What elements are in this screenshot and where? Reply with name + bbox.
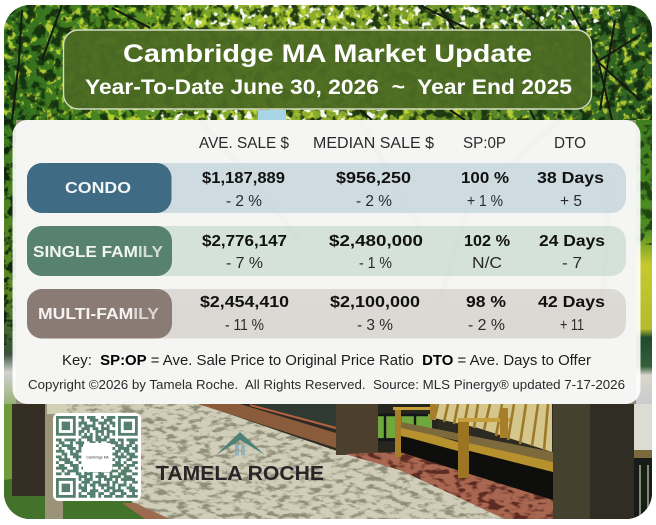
single family values: 24 Days (539, 233, 605, 250)
single family changes: - 7 % (226, 255, 263, 272)
right background (634, 404, 652, 519)
foliage canopy (4, 5, 652, 125)
left foliage strip (4, 120, 16, 420)
logo wordmark: TAMELA ROCHE (156, 463, 324, 485)
single family label (27, 226, 172, 276)
logo: Tamela Roche (156, 432, 324, 485)
icon: house roof (216, 432, 265, 456)
column headers: AVE. SALE $ (199, 135, 289, 152)
multi-family values: $2,454,410 (200, 294, 289, 311)
multi-family values: $2,100,000 (330, 294, 420, 311)
multi-family changes: - 3 % (357, 317, 393, 334)
column headers: MEDIAN SALE $ (313, 135, 434, 152)
QR code (53, 413, 141, 501)
bench shadow (400, 436, 553, 500)
condo values: 100 % (461, 170, 509, 187)
large stone pier (553, 404, 634, 519)
multi-family changes: - 2 % (468, 317, 505, 334)
condo changes: + 1 % (467, 193, 503, 210)
multi-family label: MULTI-FAM ILY (38, 306, 160, 323)
multi-family values: 98 % (466, 294, 506, 311)
multi-family values (200, 294, 605, 311)
key: Key: SP:OP = Ave. Sale Price to Original Price Ratio DTO = Ave. Days to Offer (62, 352, 591, 369)
column headers (199, 135, 586, 152)
QR finder squares (57, 417, 136, 496)
single family changes: N/C (472, 255, 502, 272)
single family values: 102 % (464, 233, 510, 250)
single family values (202, 233, 605, 250)
single family changes (226, 255, 582, 272)
condo values (202, 170, 604, 187)
condo values: $1,187,889 (202, 170, 285, 187)
condo changes: + 5 (560, 193, 582, 210)
QR centre label: Cambridge MA (86, 456, 110, 460)
right foliage strip (636, 120, 652, 410)
row: condo (27, 163, 626, 213)
condo changes: - 2 % (356, 193, 392, 210)
single family values: $2,480,000 (329, 233, 423, 250)
multi-family changes: + 11 (560, 317, 584, 334)
multi-family label (27, 289, 172, 338)
multi-family values: 42 Days (538, 294, 605, 311)
brick path (345, 452, 553, 519)
grass and tree trunk (4, 404, 170, 519)
brick edge and iron fence (198, 404, 432, 448)
title banner (64, 30, 592, 109)
wooden benches (393, 404, 553, 478)
panel: market data (12, 120, 640, 404)
condo changes: - 2 % (226, 193, 262, 210)
condo label (27, 163, 172, 213)
single family values: $2,776,147 (202, 233, 287, 250)
scene behind translucent panel (16, 120, 636, 404)
multi-family changes: - 11 % (225, 317, 264, 334)
condo values: 38 Days (537, 170, 604, 187)
concrete pier (336, 404, 378, 455)
condo label: CONDO (65, 180, 131, 197)
single family changes: - 1 % (359, 255, 392, 272)
condo changes (226, 193, 582, 210)
multi-family changes (225, 317, 584, 334)
single family label: SINGLE FAM ILY (33, 244, 164, 261)
title line 2: Year-To-Date June 30, 2026 ~ Year End 2025 (85, 75, 572, 99)
condo values: $956,250 (336, 170, 411, 187)
column headers: SP:0P (463, 135, 506, 152)
title line 1: Cambridge MA Market Update (123, 40, 532, 68)
row: multi-family (27, 289, 626, 338)
single family changes: - 7 (562, 255, 582, 272)
ground: pavement (4, 404, 652, 519)
copyright: Copyright ©2026 by Tamela Roche. All Rights Reserved. Source: MLS Pinergy® updated 7-17-2026 (28, 377, 625, 392)
column headers: DTO (554, 135, 586, 152)
row: single family (27, 226, 626, 276)
